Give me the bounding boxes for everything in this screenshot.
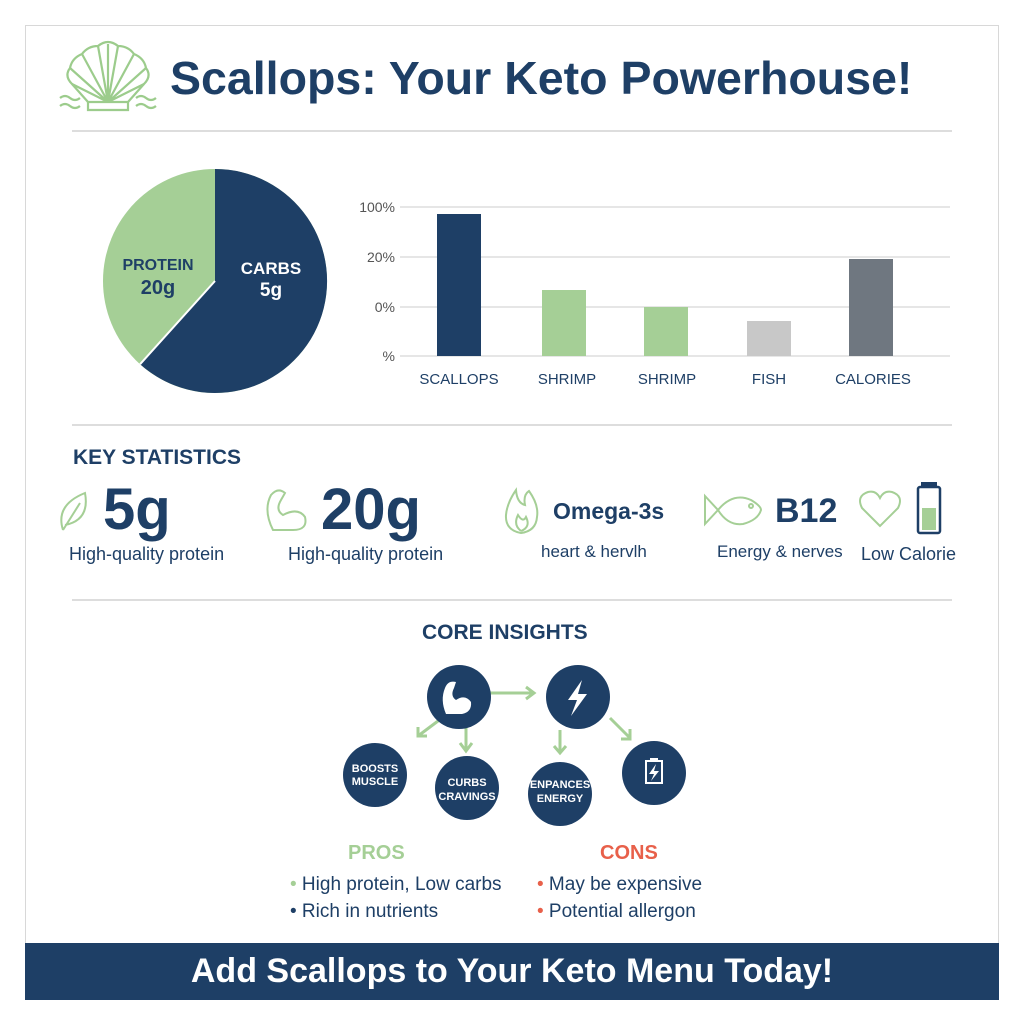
cons: • Potential allergon xyxy=(537,901,696,922)
stats row: 5g xyxy=(103,477,171,542)
flow diagram: ENPANCES xyxy=(530,779,590,791)
cons xyxy=(537,842,702,922)
bar chart: 0% xyxy=(375,299,395,315)
pros xyxy=(290,842,502,922)
title: Scallops: Your Keto Powerhouse! xyxy=(170,52,912,104)
flow diagram: MUSCLE xyxy=(352,776,398,788)
pros: PROS xyxy=(348,842,405,864)
flow diagram xyxy=(343,665,686,826)
stats row: Omega-3s xyxy=(553,498,664,524)
footer banner xyxy=(25,943,999,1000)
bar chart: % xyxy=(383,348,395,364)
stats row: High-quality protein xyxy=(69,544,224,564)
bar chart: SHRIMP xyxy=(538,371,596,388)
flow diagram: CURBS xyxy=(447,777,487,789)
pie chart xyxy=(103,169,328,393)
bar chart: CALORIES xyxy=(835,371,911,388)
bar chart xyxy=(359,199,950,388)
flow diagram: BOOSTS xyxy=(352,763,398,775)
pros: • Rich in nutrients xyxy=(290,901,438,922)
heading: key statistics: KEY STATISTICS xyxy=(73,446,241,469)
cons: • May be expensive xyxy=(537,874,702,895)
pie chart: CARBS xyxy=(241,259,301,278)
stats row: B12 xyxy=(775,492,837,530)
stats row: Energy & nerves xyxy=(717,542,843,561)
pie chart: PROTEIN xyxy=(122,257,194,274)
stats row: High-quality protein xyxy=(288,544,443,564)
flow diagram: ENERGY xyxy=(537,793,584,805)
pros: • High protein, Low carbs xyxy=(290,874,502,895)
stats row xyxy=(60,477,956,564)
bar chart: 100% xyxy=(359,199,395,215)
bar chart: FISH xyxy=(752,371,786,388)
heading: core insights: CORE INSIGHTS xyxy=(422,621,588,644)
stats row: Low Calorie xyxy=(861,544,956,564)
bar chart: SHRIMP xyxy=(638,371,696,388)
bar chart: SCALLOPS xyxy=(419,371,499,388)
cons: CONS xyxy=(600,842,658,864)
bar chart: 20% xyxy=(367,249,395,265)
flow diagram: CRAVINGS xyxy=(438,791,496,803)
pie chart: 20g xyxy=(141,277,175,299)
stats row: heart & hervlh xyxy=(541,542,647,561)
icon: shell xyxy=(59,40,157,112)
pie chart: 5g xyxy=(260,280,282,301)
footer banner: Add Scallops to Your Keto Menu Today! xyxy=(191,952,833,990)
stats row: 20g xyxy=(321,477,421,542)
